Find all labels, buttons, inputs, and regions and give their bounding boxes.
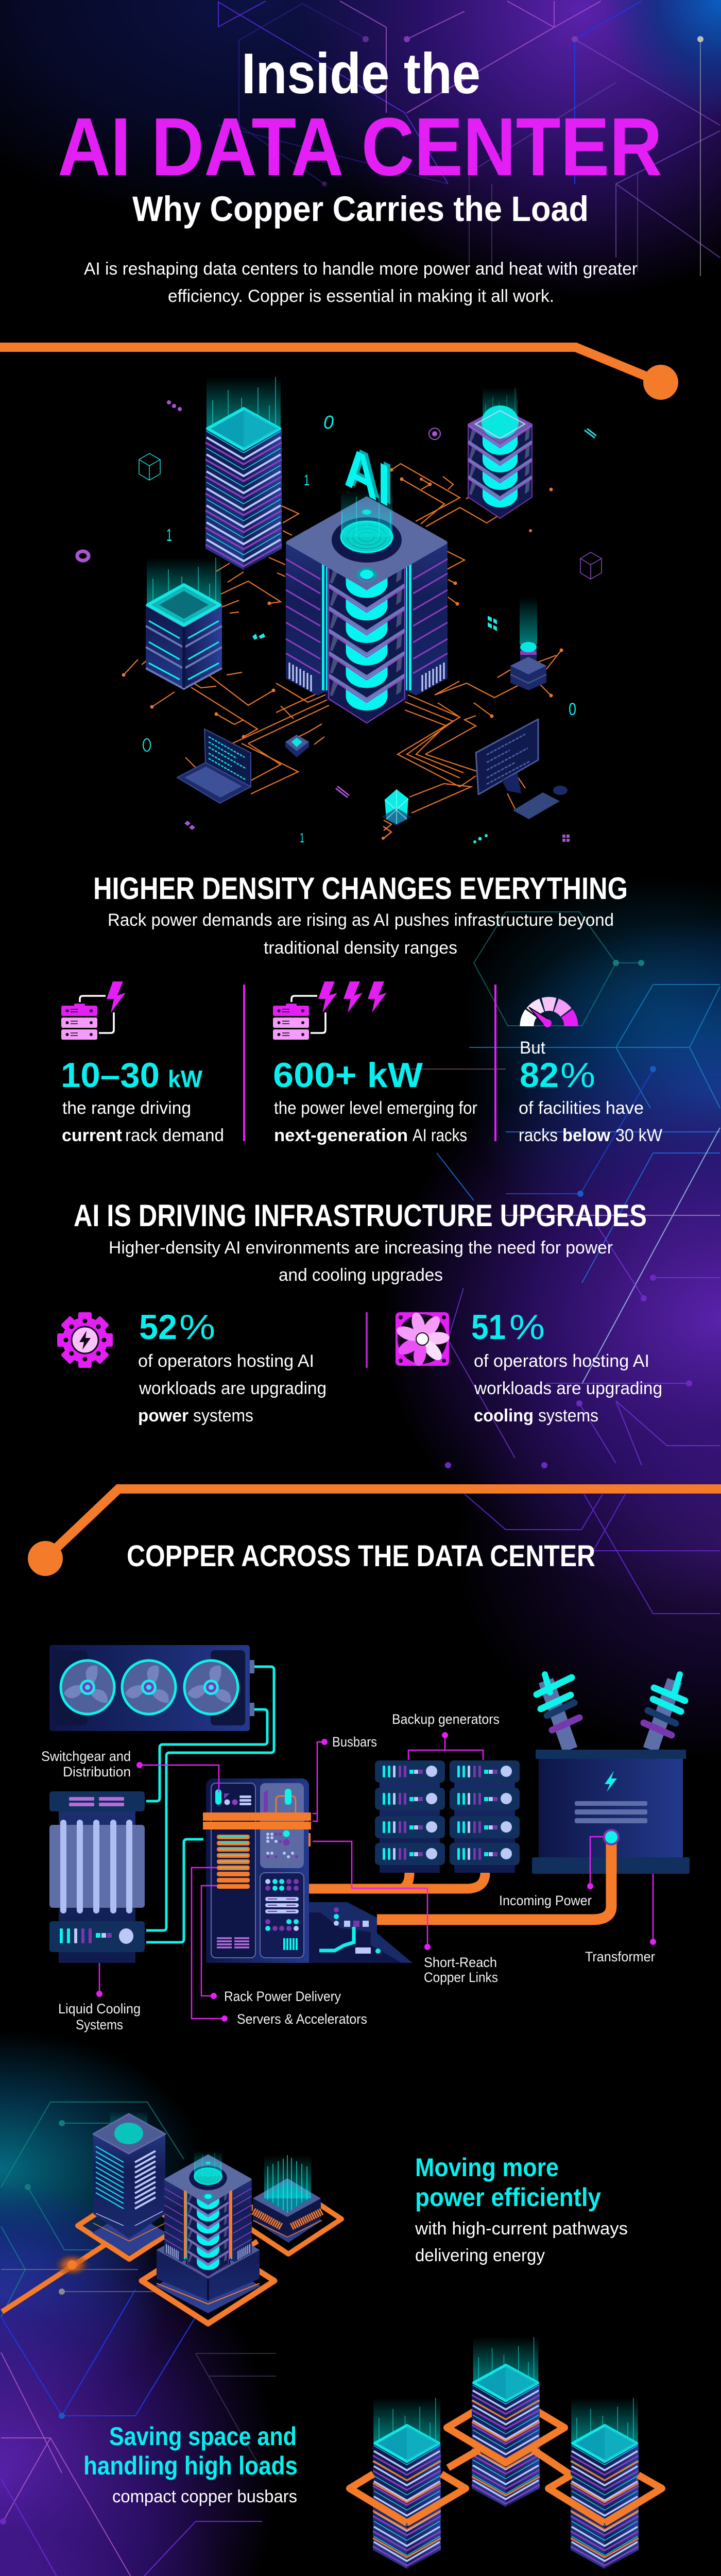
chip with data beams xyxy=(253,2155,322,2243)
3D AI letters: AI xyxy=(347,431,393,519)
value: % xyxy=(509,1308,545,1347)
caption xyxy=(474,1351,662,1426)
radiator with three fans xyxy=(49,1645,254,1731)
caption: below xyxy=(562,1126,611,1145)
caption: workloads are upgrading xyxy=(139,1379,327,1398)
divider xyxy=(494,985,496,1141)
label: short reach: Short-Reach xyxy=(424,1955,497,1970)
stat: 51 percent cooling xyxy=(394,1308,662,1426)
callout dots xyxy=(96,1732,656,2022)
label: rack power delivery: Rack Power Delivery xyxy=(224,1989,341,2004)
benefit heading: power efficiently xyxy=(415,2183,601,2212)
label: incoming power: Incoming Power xyxy=(499,1893,592,1908)
subheading xyxy=(108,910,614,958)
caption: systems xyxy=(193,1406,253,1426)
caption: workloads are upgrading xyxy=(474,1379,662,1398)
copper rings and feed xyxy=(2,2184,341,2312)
value xyxy=(61,1056,203,1095)
icon: server with three bolts xyxy=(273,981,387,1040)
stat: 82 percent xyxy=(519,1004,662,1145)
stat: 52 percent power xyxy=(57,1308,327,1426)
subheading: traditional density ranges xyxy=(264,938,457,958)
callout lines xyxy=(99,1735,653,2019)
value: 600+ kW xyxy=(273,1056,423,1095)
intro paragraph xyxy=(84,259,638,306)
value xyxy=(139,1308,215,1347)
stat: 10-30 kW xyxy=(61,981,224,1145)
circuit traces xyxy=(122,464,563,831)
caption: of operators hosting AI xyxy=(474,1351,649,1371)
subheading: and cooling upgrades xyxy=(279,1265,443,1285)
copper ring left xyxy=(350,2474,466,2523)
copper ring middle, front xyxy=(447,2428,564,2463)
laptop xyxy=(177,729,251,803)
value: % xyxy=(179,1308,215,1347)
label: servers and accelerators: Servers & Accelerators xyxy=(237,2011,367,2027)
label: backup generators: Backup generators xyxy=(392,1711,500,1727)
copper conduit from generators xyxy=(309,1873,485,1889)
floating decorations: 1 xyxy=(304,472,310,489)
benefit body: delivering energy xyxy=(415,2246,545,2265)
copper diagram xyxy=(41,1645,690,2032)
label: short reach: Copper Links xyxy=(424,1970,498,1985)
benefit heading: handling high loads xyxy=(83,2451,298,2480)
caption xyxy=(274,1098,477,1145)
tower with stripes xyxy=(92,2111,166,2256)
benefit body: with high-current pathways xyxy=(415,2219,628,2239)
subtitle: Why Copper Carries the Load xyxy=(132,189,589,229)
caption: current xyxy=(62,1126,122,1145)
benefit heading: Saving space and xyxy=(109,2422,297,2451)
section: higher density xyxy=(61,871,662,1145)
small tower right xyxy=(510,597,546,690)
server rack and machine xyxy=(203,1778,413,1963)
caption: of operators hosting AI xyxy=(138,1351,314,1371)
caption: the range driving xyxy=(62,1098,191,1118)
tower right xyxy=(571,2398,639,2569)
orange connector line middle xyxy=(28,1484,721,1576)
benefit 2 illustration: busbars xyxy=(350,2337,662,2569)
backup generators xyxy=(375,1760,520,1873)
liquid cooling unit xyxy=(49,1791,145,1963)
connecting copper links xyxy=(448,2450,572,2476)
heading: HIGHER DENSITY CHANGES EVERYTHING xyxy=(93,871,628,906)
benefit body xyxy=(415,2219,628,2265)
benefit 2 text xyxy=(83,2422,298,2506)
label: transformer: Transformer xyxy=(585,1949,655,1964)
tower left xyxy=(373,2398,441,2569)
copper ring right xyxy=(548,2475,662,2523)
orange connector line top xyxy=(0,343,678,400)
hero illustration: isometric data center xyxy=(77,377,602,845)
benefit 1 illustration: power pathways xyxy=(2,2111,341,2324)
label: liquid cooling: Liquid Cooling xyxy=(58,2001,141,2016)
value xyxy=(471,1308,545,1347)
icon: server with one bolt xyxy=(61,981,126,1040)
benefit 1 text xyxy=(415,2153,628,2265)
divider xyxy=(243,985,245,1141)
caption xyxy=(138,1351,327,1426)
intro paragraph: AI is reshaping data centers to handle more power and heat with greater xyxy=(84,259,638,279)
label: switchgear: Switchgear and xyxy=(41,1749,131,1764)
stat: 600+ kW xyxy=(273,981,477,1145)
title block xyxy=(58,42,662,229)
subheading: Rack power demands are rising as AI pushes infrastructure beyond xyxy=(108,910,614,930)
benefit body: compact copper busbars xyxy=(112,2487,297,2506)
label: liquid cooling: Systems xyxy=(76,2017,123,2032)
value: 51 xyxy=(471,1308,506,1347)
value: 10–30 xyxy=(61,1056,160,1095)
icon: cooling fan xyxy=(394,1311,450,1367)
caption xyxy=(519,1098,662,1145)
divider xyxy=(366,1312,368,1368)
central AI tower xyxy=(286,431,448,723)
label: short reach xyxy=(424,1955,498,1985)
caption: cooling xyxy=(474,1406,534,1426)
caption: of facilities have xyxy=(519,1098,644,1118)
title line: AI DATA CENTER: AI DATA CENTER xyxy=(58,100,662,193)
caption: systems xyxy=(538,1406,598,1426)
benefit heading: Moving more xyxy=(415,2153,559,2182)
caption: the power level emerging for xyxy=(274,1098,477,1118)
floating decorations: 1 xyxy=(166,526,172,545)
section heading: copper across: COPPER ACROSS THE DATA CENTER xyxy=(127,1539,595,1573)
caption: next-generation xyxy=(274,1126,408,1145)
transformer xyxy=(377,1674,690,1920)
intro paragraph: efficiency. Copper is essential in making it all work. xyxy=(168,286,554,306)
floating decorations: 0 xyxy=(323,412,334,433)
cyan coolant pipes xyxy=(146,1667,274,1942)
desktop monitor xyxy=(476,719,568,819)
subheading: Higher-density AI environments are increasing the need for power xyxy=(109,1238,613,1258)
server tower lower left xyxy=(146,557,222,689)
caption: AI racks xyxy=(413,1126,467,1145)
floating decorations xyxy=(77,400,602,845)
value: % xyxy=(560,1056,595,1095)
server tower top right xyxy=(468,388,532,518)
section: infrastructure upgrades xyxy=(57,1198,662,1426)
subheading xyxy=(109,1238,613,1285)
caption: power xyxy=(138,1406,188,1426)
caption: rack demand xyxy=(125,1126,224,1145)
cpu chip xyxy=(285,735,309,757)
icon: gear with bolt xyxy=(57,1312,113,1368)
server tower top left xyxy=(205,377,282,570)
value xyxy=(520,1056,595,1095)
benefit heading xyxy=(415,2153,601,2212)
floating decorations: 1 xyxy=(300,830,304,845)
central tower on base xyxy=(156,2150,261,2313)
crystal xyxy=(382,789,411,826)
label: busbars: Busbars xyxy=(332,1734,377,1750)
title line: Inside the: Inside the xyxy=(242,42,480,106)
tower middle xyxy=(472,2337,540,2507)
icon: gauge xyxy=(527,1004,571,1027)
value: kW xyxy=(168,1065,203,1092)
copper ring middle, rear xyxy=(447,2393,564,2463)
label: switchgear: Distribution xyxy=(63,1764,131,1780)
label: liquid cooling xyxy=(58,2001,141,2032)
label: switchgear xyxy=(41,1749,131,1780)
benefit heading xyxy=(83,2422,298,2480)
floating decorations: 0 xyxy=(569,700,576,719)
caption: racks xyxy=(519,1126,558,1145)
3D AI letters: AI xyxy=(344,432,390,520)
value: 52 xyxy=(139,1308,177,1347)
caption: 30 kW xyxy=(615,1126,662,1145)
value: 82 xyxy=(520,1056,559,1095)
caption xyxy=(62,1098,224,1145)
base ring xyxy=(142,2239,274,2324)
But: But xyxy=(520,1038,546,1058)
